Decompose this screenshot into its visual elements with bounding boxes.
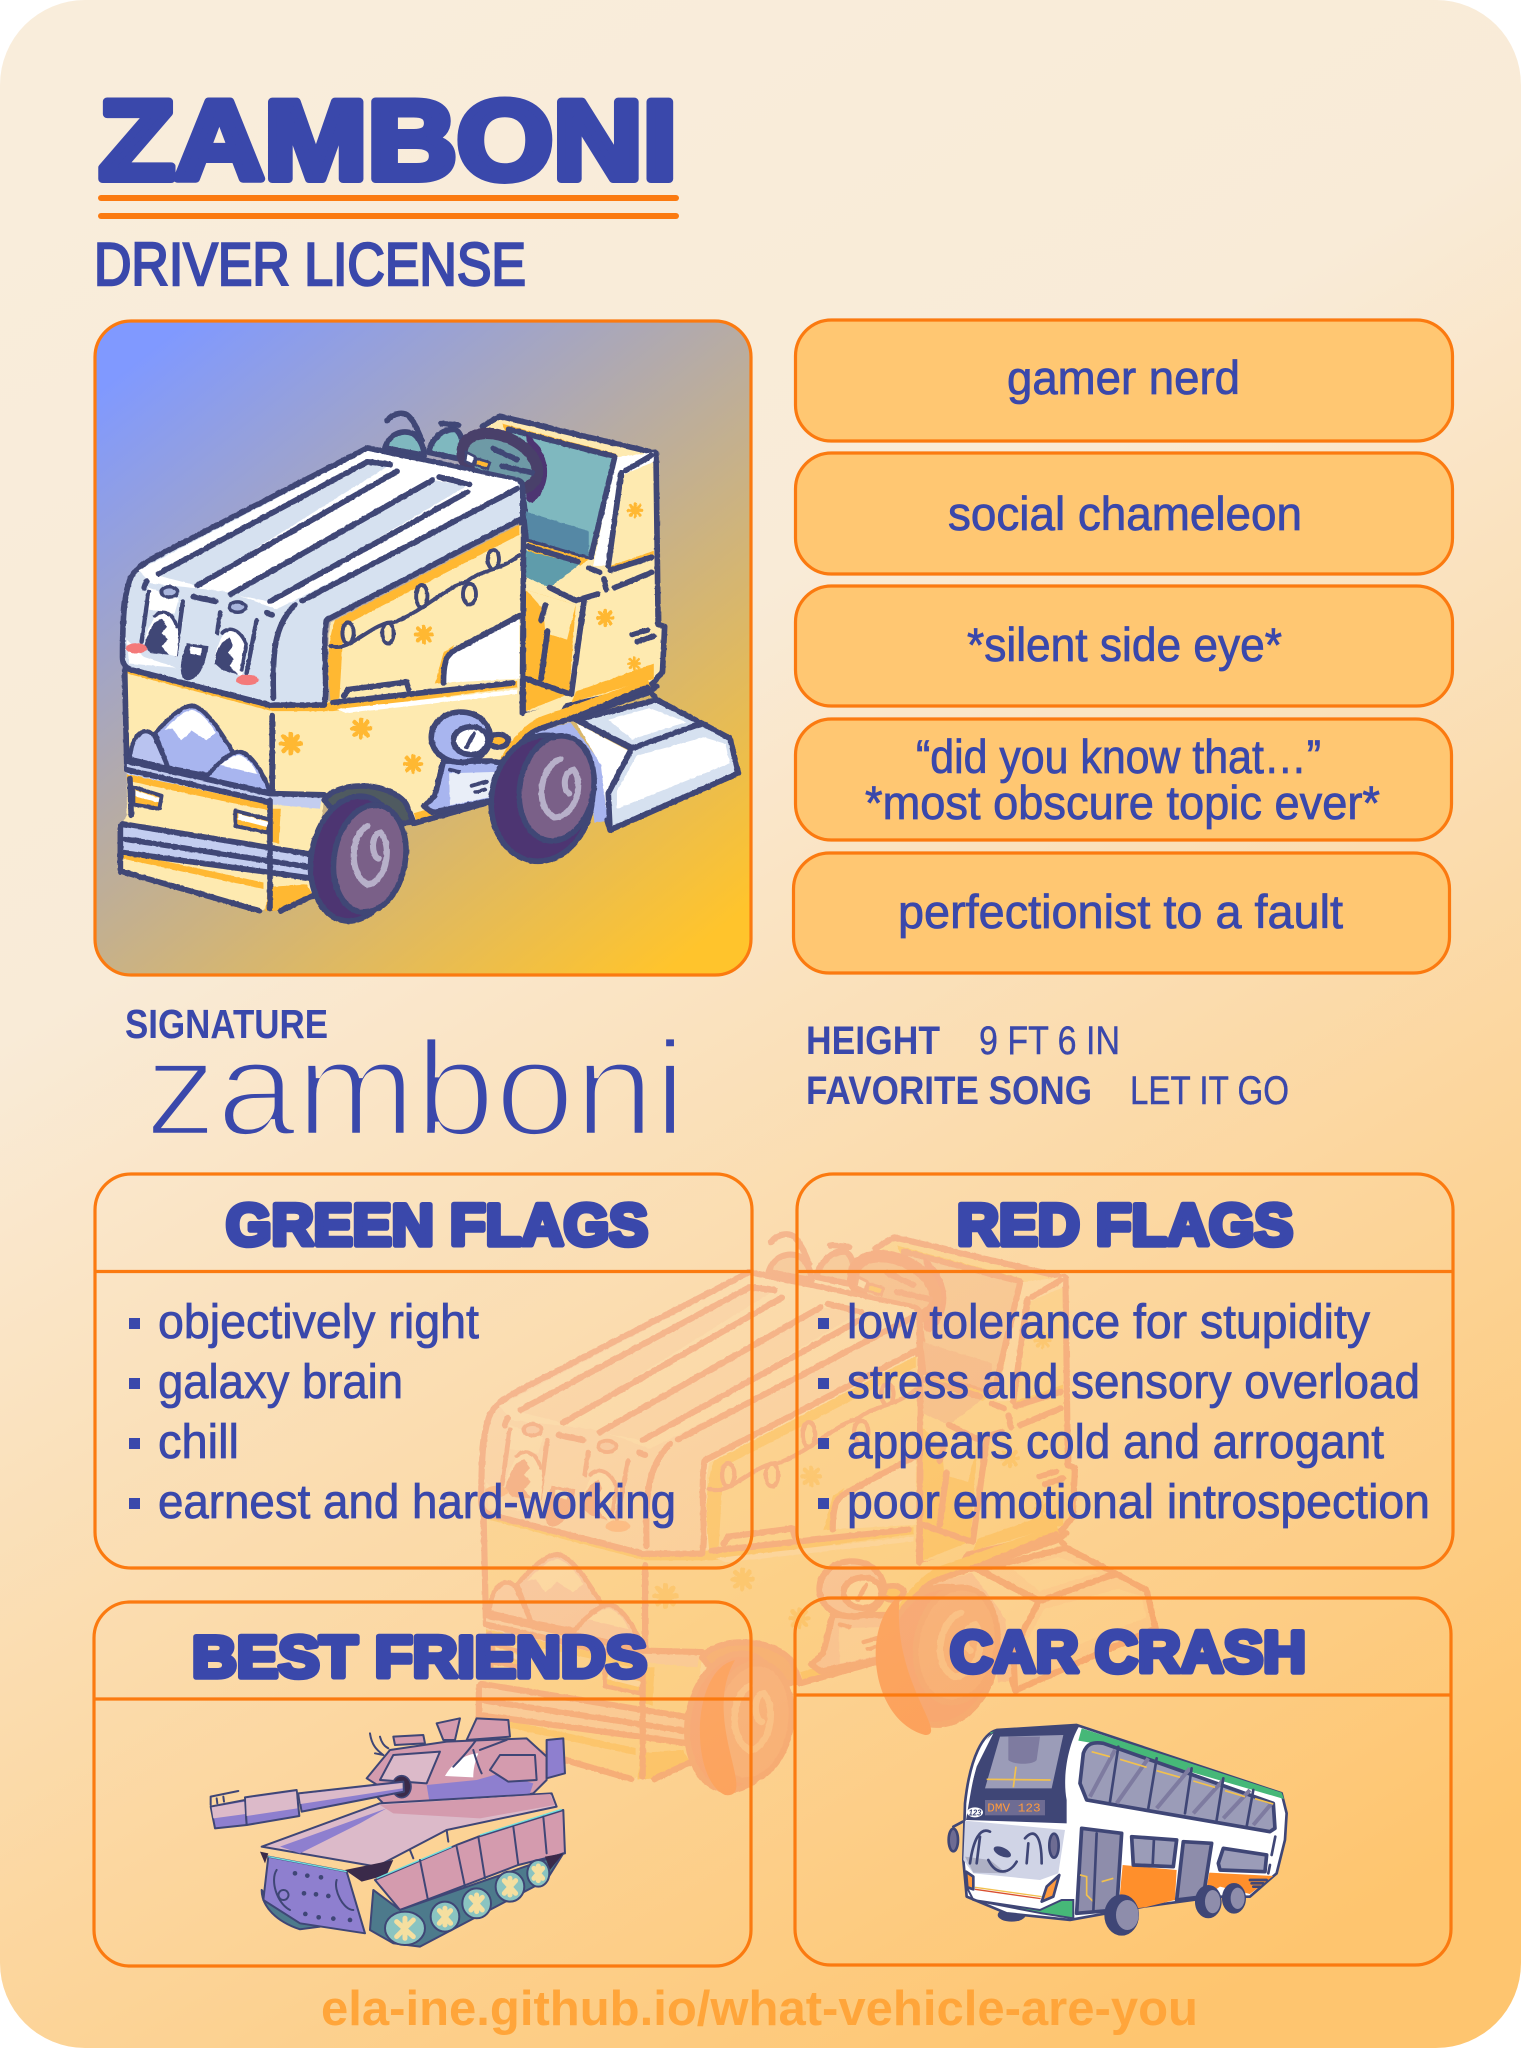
stat: favorite song: [806, 1069, 1289, 1113]
stat: height: HEIGHT: [806, 1019, 940, 1063]
illustration: tank: [211, 1718, 565, 1947]
pill: perfectionist: [794, 853, 1450, 973]
portrait panel: [95, 321, 751, 975]
list: green flags: earnest and hard-working: [158, 1476, 676, 1529]
illustration: double decker bus: [949, 1725, 1287, 1934]
list: red flags: poor emotional introspection: [847, 1476, 1430, 1529]
subtitle: DRIVER LICENSE: [94, 231, 526, 298]
stat: height: 9 FT 6 IN: [979, 1019, 1120, 1063]
illustration: zamboni: [120, 413, 738, 928]
list: green flags: [129, 1296, 676, 1529]
website url: ela-ine.github.io/what-vehicle-are-you: [321, 1982, 1198, 2036]
stat: favorite song: FAVORITE SONG: [806, 1069, 1092, 1113]
list: green flags: galaxy brain: [158, 1356, 403, 1409]
panel: red flags: [797, 1174, 1453, 1568]
pill: gamer nerd: [796, 320, 1452, 441]
stat: favorite song: LET IT GO: [1130, 1069, 1289, 1113]
pill: did you know that: [796, 719, 1452, 840]
panel: green flags: [95, 1174, 752, 1568]
heading: car crash: CAR CRASH: [950, 1620, 1306, 1685]
heading: best friends: BEST FRIENDS: [192, 1625, 647, 1690]
stat: height: [806, 1019, 1120, 1063]
vehicle stats: [806, 1019, 1289, 1113]
list: red flags: low tolerance for stupidity: [847, 1296, 1370, 1349]
illustration: double decker bus: 123: [969, 1808, 982, 1817]
pill: perfectionist: perfectionist to a fault: [898, 885, 1343, 938]
pill: silent side eye: *silent side eye*: [967, 618, 1282, 671]
pill: social chameleon: [796, 453, 1452, 574]
signature label: SIGNATURE: [125, 1001, 328, 1047]
pill: silent side eye: [796, 586, 1452, 706]
heading: red flags: RED FLAGS: [957, 1193, 1293, 1258]
title: ZAMBONI: [99, 78, 677, 203]
signature: zamboni: [145, 1013, 686, 1164]
pill: did you know that: “did you know that…”: [916, 730, 1321, 783]
list: red flags: appears cold and arrogant: [847, 1416, 1384, 1469]
list: green flags: objectively right: [158, 1296, 479, 1349]
list: red flags: stress and sensory overload: [847, 1356, 1420, 1409]
heading: green flags: GREEN FLAGS: [226, 1193, 648, 1258]
title double rule: [98, 195, 679, 219]
pill: social chameleon: social chameleon: [948, 487, 1302, 540]
list: red flags: [818, 1296, 1430, 1529]
pill: did you know that: *most obscure topic ever*: [865, 776, 1380, 829]
panel: best friends: [94, 1602, 751, 1966]
pill: gamer nerd: gamer nerd: [1007, 351, 1240, 404]
personality pills: [794, 320, 1452, 973]
watermark zamboni: [479, 1234, 1156, 1798]
panel: car crash: [795, 1598, 1451, 1965]
illustration: double decker bus: DMV 123: [987, 1801, 1041, 1815]
list: green flags: chill: [158, 1416, 239, 1469]
